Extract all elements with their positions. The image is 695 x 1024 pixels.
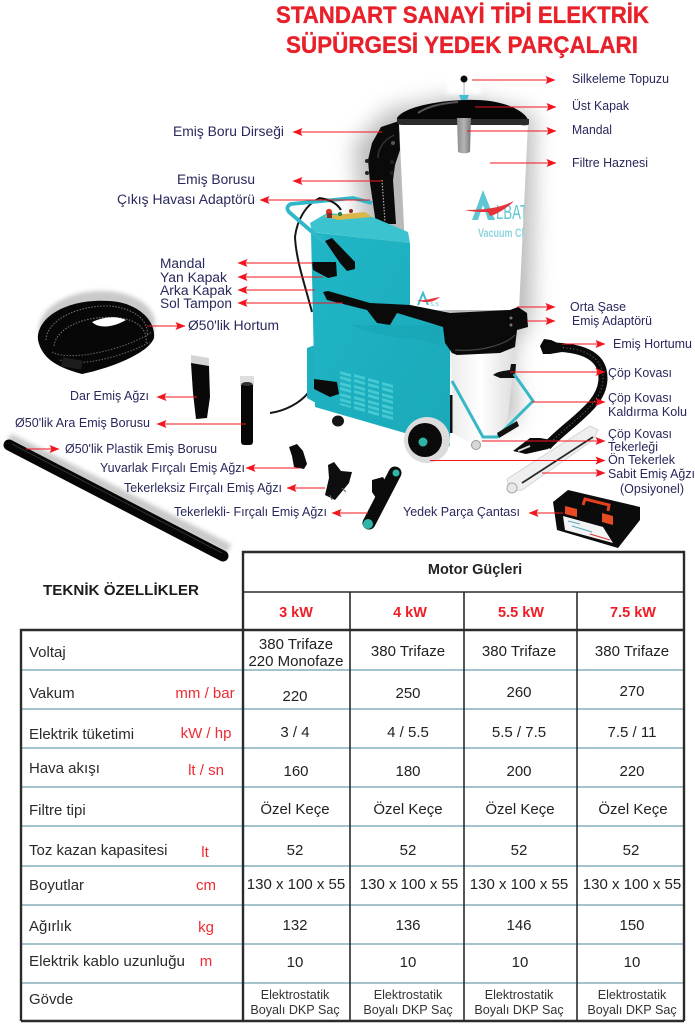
callout: Çöp Kovası Tekerleği: Tekerleği [608, 440, 658, 454]
header: power columns [279, 605, 656, 621]
callout: Ön Tekerlek: Ön Tekerlek [608, 453, 676, 467]
row: Toz kazan kapasitesi: 52 [623, 842, 639, 859]
row: Gövde: Elektrostatik [598, 988, 667, 1002]
callout: Çöp Kovası Kaldırma Kolu: Kaldırma Kolu [608, 405, 687, 419]
row: Boyutlar: cm [196, 877, 216, 894]
title [276, 2, 649, 59]
callout: Emiş Boru Dirseği: Emiş Boru Dirseği [173, 124, 284, 139]
row: Toz kazan kapasitesi: 52 [511, 842, 527, 859]
row: Voltaj [29, 636, 669, 670]
row: Vakum [29, 683, 645, 705]
power cable [270, 198, 320, 413]
cabinet top [310, 213, 410, 243]
header: power columns: 7.5 kW [610, 605, 656, 621]
row: Gövde: Boyalı DKP Saç [250, 1003, 340, 1017]
row: Filtre tipi: Özel Keçe [485, 800, 555, 818]
filter tank [399, 123, 528, 310]
side latch [312, 262, 337, 278]
row: Voltaj: 380 Trifaze [595, 643, 669, 660]
row: Gövde: Boyalı DKP Saç [587, 1003, 677, 1017]
callout: Orta Şase [517, 300, 626, 314]
control panel [323, 209, 372, 220]
tank logo: Vacuum Cl [478, 226, 524, 240]
callout: Silkeleme Topuzu: Silkeleme Topuzu [572, 72, 669, 86]
row: Vakum: 250 [395, 685, 421, 702]
callout: Hortum [147, 318, 279, 333]
row: Elektrik kablo uzunluğu: Elektrik kablo uzunluğu [29, 953, 185, 970]
part: plastic tube [9, 438, 229, 556]
callout: Yedek Parça Çantası: Yedek Parça Çantası [403, 505, 520, 519]
row: Hava akışı: 160 [283, 763, 309, 780]
shaker knob [459, 76, 469, 100]
callout: Dar Emiş Ağzı [70, 389, 197, 403]
row: Elektrik kablo uzunluğu: m [200, 953, 212, 970]
dust bin [452, 345, 516, 441]
row: Gövde: Boyalı DKP Saç [363, 1003, 453, 1017]
row: Elektrik kablo uzunluğu: 10 [624, 954, 640, 971]
vacuum cleaner illustration [270, 68, 534, 463]
callout: Üst Kapak: Üst Kapak [572, 99, 630, 113]
small logo: S.S [430, 302, 439, 308]
row: Voltaj: 380 Trifaze [482, 643, 556, 660]
row: Elektrik kablo uzunluğu: 10 [287, 954, 303, 971]
row: Ağırlık: 150 [619, 917, 645, 934]
row: Voltaj: Voltaj [29, 644, 66, 661]
row: Voltaj: 380 Trifaze [371, 643, 445, 660]
row: Hava akışı: 220 [619, 763, 645, 780]
row: Gövde: Gövde [29, 991, 73, 1008]
row: Filtre tipi: Özel Keçe [598, 800, 668, 818]
row: Ağırlık: kg [198, 919, 214, 936]
tank logo [465, 190, 524, 237]
small logo [417, 293, 440, 308]
row: Hava akışı: Hava akışı [29, 760, 100, 777]
row: Boyutlar: 130 x 100 x 55 [247, 876, 345, 893]
callout: Sol Tampon: Sol Tampon [160, 296, 232, 311]
row: Vakum: 270 [619, 683, 645, 700]
callout: Tekerlekli Fırçalı Emiş Ağzı: Tekerlekli- Fırçalı Emiş Ağzı [174, 505, 327, 519]
row: Vakum: mm / bar [175, 685, 235, 702]
specifications table [21, 552, 684, 1021]
row: Hava akışı: 180 [395, 763, 421, 780]
row: Elektrik tüketimi: 4 / 5.5 [387, 724, 429, 741]
header: power columns: 3 kW [279, 605, 313, 621]
tank logo: LBAT [496, 202, 528, 224]
row: Toz kazan kapasitesi [29, 842, 639, 861]
part: brush nozzle without wheels [325, 462, 352, 500]
row: Elektrik tüketimi [29, 724, 656, 743]
row: Hava akışı: 200 [506, 763, 532, 780]
row: Toz kazan kapasitesi: Toz kazan kapasitesi [29, 842, 167, 859]
title: STANDART SANAYİ TİPİ ELEKTRİK [276, 2, 649, 29]
callout: Sabit Emiş Ağzı [542, 467, 695, 496]
callout: Çöp Kovası Kaldırma Kolu [532, 391, 687, 419]
part: suction hose [513, 339, 603, 454]
row: Elektrik tüketimi: Elektrik tüketimi [29, 726, 134, 743]
row: Gövde: Elektrostatik [261, 988, 330, 1002]
callout: Yan Kapak: Yan Kapak [160, 270, 227, 285]
row: Elektrik kablo uzunluğu [29, 953, 640, 971]
callout: Dar Emiş Ağzı: Dar Emiş Ağzı [70, 389, 149, 403]
cabinet front [311, 232, 450, 446]
row: Toz kazan kapasitesi: lt [201, 844, 210, 861]
callout: Çıkış Havası Adaptörü: Çıkış Havası Adaptörü [117, 192, 255, 207]
row: Vakum: 220 [282, 688, 308, 705]
callout: Filtre Haznesi: Filtre Haznesi [572, 156, 648, 170]
ventilation slots [340, 371, 393, 420]
row: Ağırlık: 136 [395, 917, 421, 934]
part: round brush nozzle [289, 444, 307, 469]
part: spare parts case [553, 490, 640, 548]
callout: Sabit Emiş Ağzı: (Opsiyonel) [620, 482, 684, 496]
part: 50 mm hose coil [37, 287, 157, 374]
bin lifting handle [452, 374, 533, 437]
callout: Arka Kapak: Arka Kapak [160, 283, 232, 298]
callout: Çöp Kovası: Çöp Kovası [608, 366, 672, 380]
row: Elektrik kablo uzunluğu: 10 [512, 954, 528, 971]
row: Vakum: 260 [506, 684, 532, 701]
row: Filtre tipi: Özel Keçe [260, 800, 330, 818]
row: Boyutlar: 130 x 100 x 55 [470, 876, 568, 893]
row: Elektrik tüketimi: 3 / 4 [280, 724, 310, 741]
top lid [397, 100, 529, 125]
callout: Mandal top: Mandal [572, 123, 612, 137]
row: Filtre tipi: Özel Keçe [373, 800, 443, 818]
suction elbow and pipe [365, 121, 400, 224]
row: Hava akışı: lt / sn [188, 762, 224, 779]
heading: technical specifications: TEKNİK ÖZELLİKLER [43, 582, 200, 599]
table grid [21, 552, 684, 1021]
callout: Plastik Emiş Borusu: Ø50'lik Plastik Emiş Borusu [65, 442, 217, 456]
callout: Çöp Kovası Tekerleği [482, 427, 672, 454]
header: power columns: 5.5 kW [498, 605, 544, 621]
cabinet handle [287, 198, 372, 271]
part: fixed suction nozzle [507, 426, 598, 493]
tank latch [457, 118, 471, 154]
callout: Tekerleksiz Fırçalı Emiş Ağzı: Tekerleksiz Fırçalı Emiş Ağzı [124, 481, 282, 495]
row: Filtre tipi: Filtre tipi [29, 802, 86, 819]
header: power columns: 4 kW [393, 605, 427, 621]
bin caster [472, 440, 480, 450]
row: Boyutlar: 130 x 100 x 55 [360, 876, 458, 893]
callout: Emiş Borusu: Emiş Borusu [177, 172, 255, 187]
callout: Orta Şase: Orta Şase [570, 300, 626, 314]
part: narrow nozzle [191, 355, 210, 419]
row: Boyutlar: 130 x 100 x 55 [583, 876, 681, 893]
row: Ağırlık: Ağırlık [29, 918, 72, 935]
row: Voltaj: 380 Trifaze [259, 636, 333, 653]
row: Gövde [29, 988, 677, 1017]
row: Elektrik kablo uzunluğu: 10 [400, 954, 416, 971]
callout: Yuvarlak Fırçalı Emiş Ağzı: Yuvarlak Fırçalı Emiş Ağzı [100, 461, 245, 475]
row: Boyutlar [29, 876, 681, 894]
row: Voltaj: 220 Monofaze [248, 653, 344, 670]
callout: Hortum: Ø50'lik Hortum [188, 318, 279, 333]
row: Ağırlık: 146 [506, 917, 532, 934]
callout: Emiş Adaptörü: Emiş Adaptörü [572, 314, 652, 328]
row: Gövde: Elektrostatik [374, 988, 443, 1002]
callout: Emiş Adaptörü [527, 314, 652, 328]
lower side latch [314, 379, 339, 397]
callout: Çöp Kovası Kaldırma Kolu: Çöp Kovası [608, 391, 672, 405]
row: Boyutlar: Boyutlar [29, 877, 84, 894]
rear foot [332, 416, 344, 426]
callout: Sabit Emiş Ağzı: Sabit Emiş Ağzı [608, 467, 695, 481]
callout: Çöp Kovası Tekerleği: Çöp Kovası [608, 427, 672, 441]
callout: Emiş Hortumu: Emiş Hortumu [613, 337, 692, 351]
header: Motor Güçleri: Motor Güçleri [428, 562, 522, 578]
cabinet side tab [307, 345, 316, 403]
row: Vakum: Vakum [29, 685, 75, 702]
row: Toz kazan kapasitesi: 52 [400, 842, 416, 859]
bin handle [493, 364, 516, 378]
callout: Ara Emiş Borusu: Ø50'lik Ara Emiş Borusu [15, 416, 150, 430]
suction adapter [455, 316, 515, 350]
row: Toz kazan kapasitesi: 52 [287, 842, 303, 859]
middle chassis band [323, 291, 528, 355]
row: Ağırlık [29, 917, 645, 936]
callout: Mandal left: Mandal [160, 256, 205, 271]
row: Ağırlık: 132 [282, 917, 308, 934]
row: Elektrik tüketimi: 5.5 / 7.5 [492, 724, 546, 741]
row: Hava akışı [29, 760, 645, 780]
title: SÜPÜRGESİ YEDEK PARÇALARI [286, 32, 638, 59]
row: Elektrik tüketimi: 7.5 / 11 [608, 724, 656, 741]
row: Gövde: Boyalı DKP Saç [474, 1003, 564, 1017]
row: Elektrik tüketimi: kW / hp [181, 725, 231, 742]
row: Gövde: Elektrostatik [485, 988, 554, 1002]
part: brush nozzle with wheels [363, 470, 400, 529]
part: intermediate tube [240, 376, 254, 445]
callout: Emiş Hortumu [562, 337, 692, 351]
front wheel [404, 417, 450, 463]
row: Filtre tipi [29, 800, 668, 819]
